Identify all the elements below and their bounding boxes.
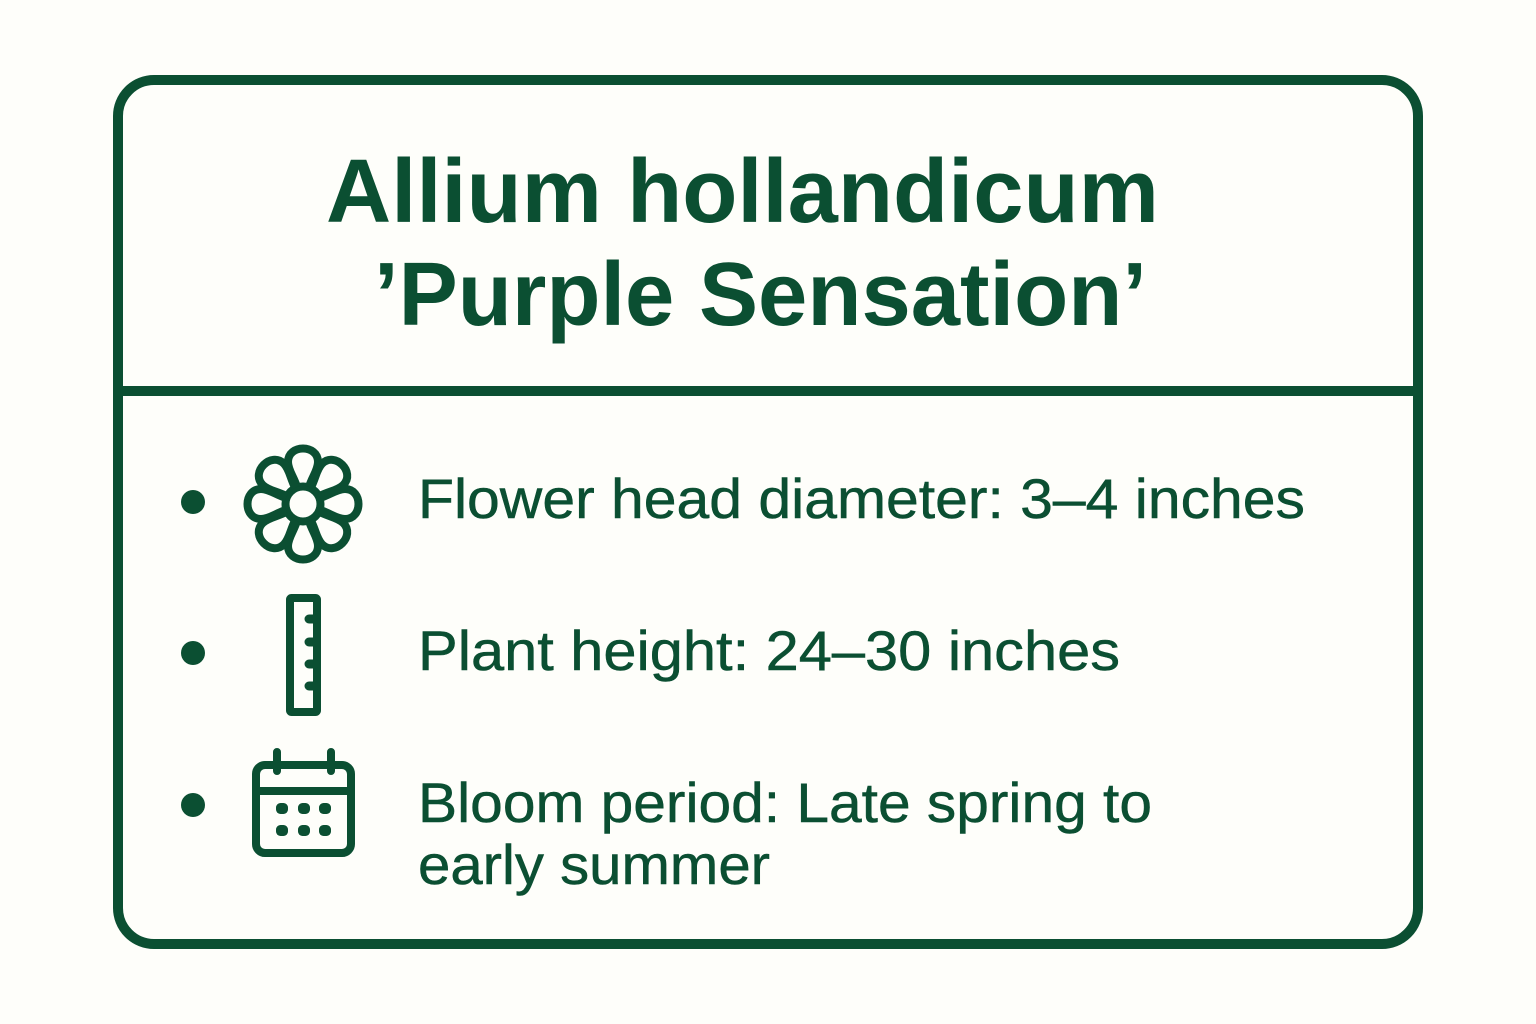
text: bloom period: early summer <box>418 833 770 896</box>
text: flower head diameter: Flower head diameter: 3–4 inches <box>418 467 1305 530</box>
panel: card frame <box>118 80 1418 944</box>
text: bloom period: Bloom period: Late spring to <box>418 771 1152 834</box>
icon: calendar <box>256 752 351 853</box>
icon: ruler <box>290 598 317 712</box>
text: bloom period <box>418 771 1152 896</box>
bullet: plant height <box>181 641 205 665</box>
title: Allium hollandicum <box>326 142 1159 242</box>
title <box>326 142 1159 345</box>
header divider <box>118 386 1418 396</box>
text: plant height: Plant height: 24–30 inches <box>418 619 1120 682</box>
bullet: bloom period <box>181 793 205 817</box>
icon: flower <box>248 448 358 560</box>
title: ’Purple Sensation’ <box>374 245 1147 345</box>
bullet: flower head <box>181 490 205 514</box>
